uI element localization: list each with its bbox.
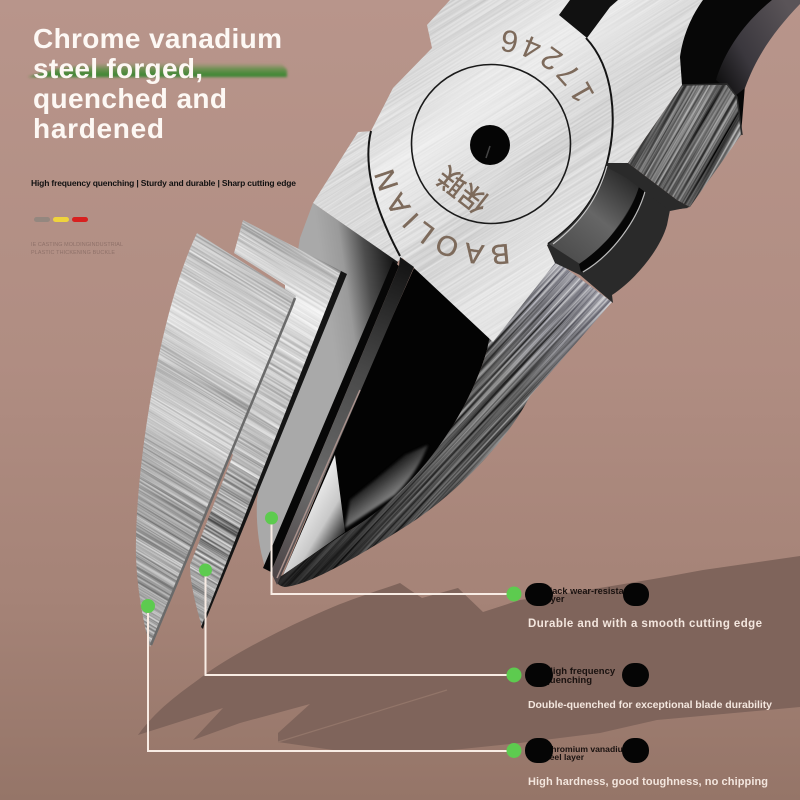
silver pivot body	[370, 0, 703, 342]
pliers illustration	[136, 0, 800, 647]
engraved model number: 17246: 17246	[502, 30, 594, 102]
pivot disc	[412, 64, 570, 224]
brushed handle shoulder	[608, 83, 743, 211]
left cheek plate	[313, 131, 402, 262]
cast shadow of pliers	[138, 556, 800, 752]
engraved Chinese brand: 保联	[432, 160, 495, 219]
title: steel forged,	[33, 53, 203, 84]
title	[33, 23, 282, 144]
pivot hole	[470, 125, 510, 165]
title: hardened	[33, 113, 164, 144]
handle grip	[676, 0, 800, 135]
callout 3: chromium vanadium steel layer: Chromium vanadium	[545, 744, 631, 754]
green brush highlight behind title	[28, 62, 287, 77]
callout 1: black wear-resistant layer: Black wear-resistant	[543, 586, 632, 596]
callout 1: black wear-resistant layer	[506, 583, 762, 630]
title: quenched and	[33, 83, 227, 114]
small caption	[31, 242, 123, 256]
callout 3: chromium vanadium steel layer	[506, 738, 768, 788]
callout leader lines	[148, 518, 508, 751]
callout 1: black wear-resistant layer: Durable and with a smooth cutting edge	[528, 618, 762, 630]
blade markers	[141, 512, 278, 613]
title: Chrome vanadium	[33, 23, 282, 54]
engraved brand: BAOLIAN: BAOLIAN	[374, 169, 508, 264]
callout 2: high frequency quenching: High frequency	[546, 666, 616, 677]
small caption: IE CASTING MOLDINGINDUSTRIAL	[31, 242, 123, 248]
blade layer: black wear-resistant	[257, 203, 414, 585]
dark ring section	[547, 163, 688, 303]
outer arc lines	[368, 38, 613, 256]
colour dashes	[34, 217, 88, 222]
callout 3: chromium vanadium steel layer: High hardness, good toughness, no chipping	[528, 776, 768, 788]
outer jaw rim	[278, 259, 612, 587]
small caption: PLASTIC THICKENING BUCKLE	[31, 250, 115, 256]
callout 2: high frequency quenching: Double-quenched for exceptional blade durability	[528, 699, 772, 711]
cutter interior	[283, 268, 497, 575]
callout 3: chromium vanadium steel layer: steel layer	[542, 752, 585, 762]
callout 2: high frequency quenching: quenching	[544, 675, 592, 686]
callout 1: black wear-resistant layer: layer	[543, 594, 565, 604]
top notch	[559, 0, 618, 38]
callout 2: high frequency quenching	[506, 663, 772, 711]
blade layer: chromium vanadium steel	[136, 233, 296, 647]
blade layer: high frequency quenching	[190, 220, 347, 629]
subtitle: High frequency quenching | Sturdy and durable | Sharp cutting edge	[31, 178, 296, 188]
